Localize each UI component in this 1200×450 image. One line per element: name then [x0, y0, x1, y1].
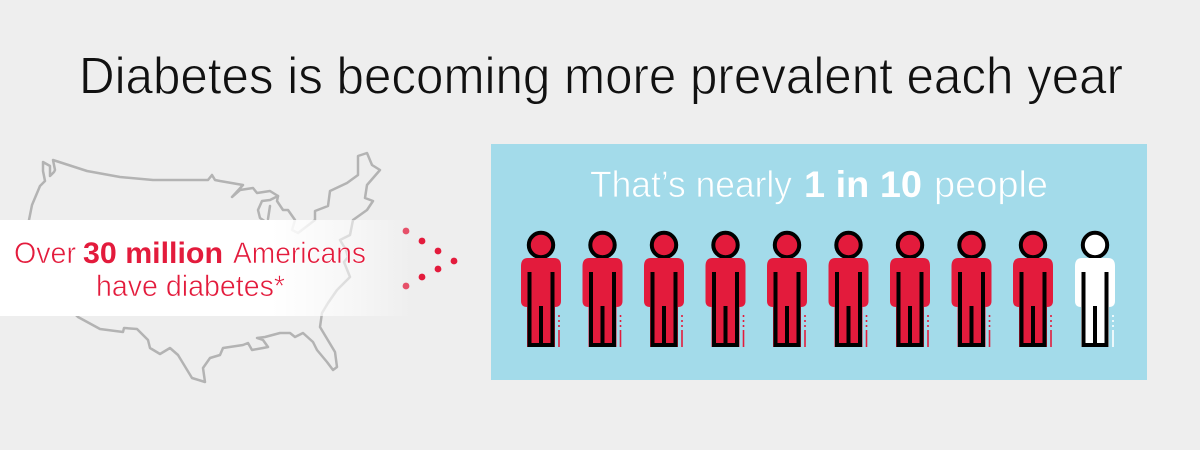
callout: 30 million Americans: 30 million: [83, 237, 223, 270]
icon: person 1: [521, 233, 561, 347]
callout: 30 million Americans: Americans: [233, 237, 366, 270]
icon: person 8: [952, 233, 992, 347]
title: Diabetes is becoming more prevalent each year: [79, 48, 1123, 106]
arrow made of dots: [403, 228, 457, 289]
row of ten people icons: [521, 233, 1115, 347]
icon: person 2: [582, 233, 622, 347]
panel: 1 in 10 people: [491, 144, 1147, 380]
icon: person 10 (white): [1075, 233, 1115, 347]
panel heading: [590, 164, 1048, 205]
callout: 30 million Americans: [14, 237, 366, 303]
panel heading: 1 in 10: [804, 164, 922, 205]
icon: person 9: [1013, 233, 1053, 347]
icon: person 3: [644, 233, 684, 347]
icon: person 6: [828, 233, 868, 347]
callout: 30 million Americans: have diabetes*: [96, 270, 285, 303]
icon: person 7: [890, 233, 930, 347]
map of the United States: [29, 153, 380, 382]
icon: person 5: [767, 233, 807, 347]
icon: person 4: [706, 233, 746, 347]
callout: 30 million Americans: Over: [14, 237, 76, 270]
panel heading: people: [934, 164, 1048, 205]
panel heading: That’s nearly: [590, 164, 792, 205]
white text band: [0, 220, 412, 316]
